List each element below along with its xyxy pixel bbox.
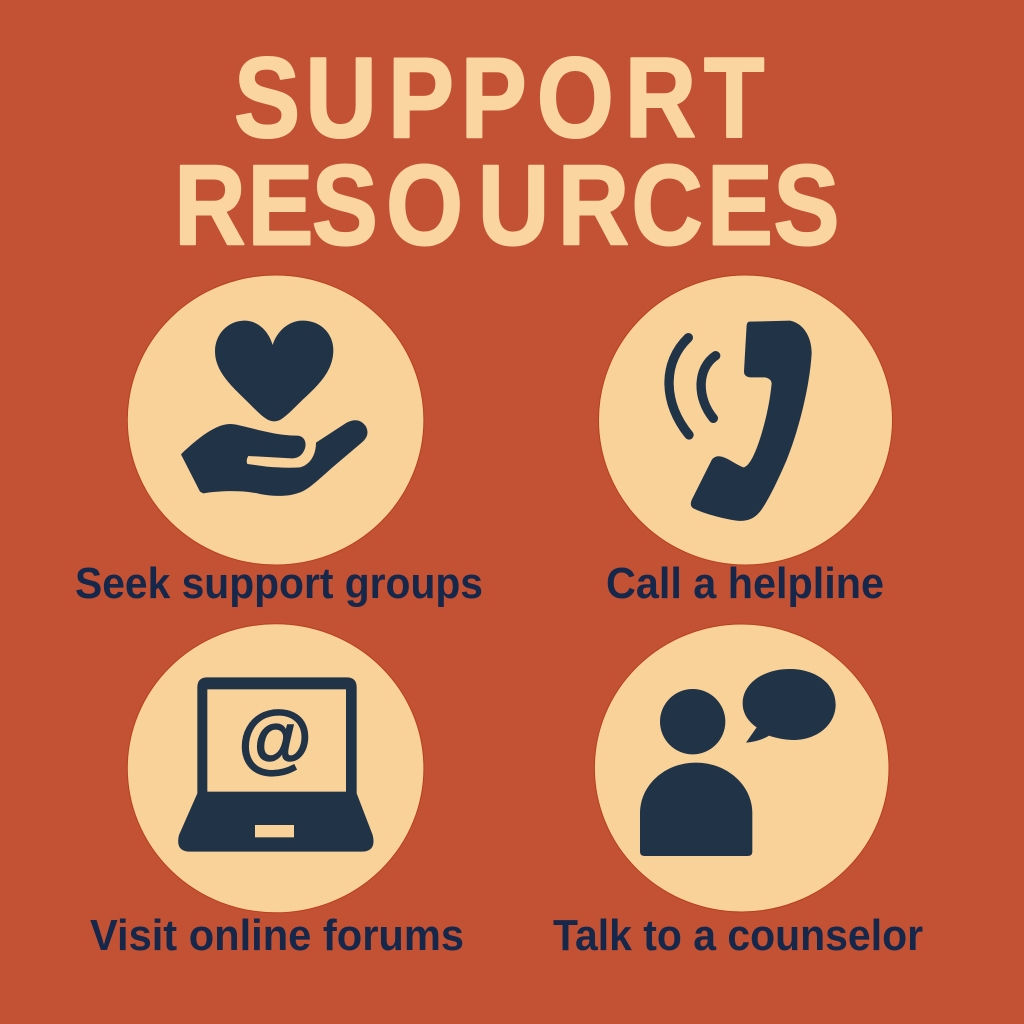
icon: person with speech bubble [640,669,836,856]
panel: visit online forums [127,624,424,913]
title [174,34,839,269]
label: seek support groups: Seek support groups [75,559,483,608]
icon: heart in open hand [181,321,367,496]
icon: telephone with sound waves [669,321,812,521]
icon: laptop with at sign: @ [238,696,312,781]
label: visit online forums: Visit online forums [90,911,464,960]
panel: talk to a counselor [594,624,889,912]
panel: seek support groups [127,275,424,565]
title: SUPPORT [234,34,764,162]
panel: call a helpline [598,275,892,565]
label: call a helpline: Call a helpline [606,559,884,608]
title: RESOURCES [174,141,839,269]
icon: laptop with at sign [178,677,374,852]
label: talk to a counselor: Talk to a counselor [553,911,923,960]
